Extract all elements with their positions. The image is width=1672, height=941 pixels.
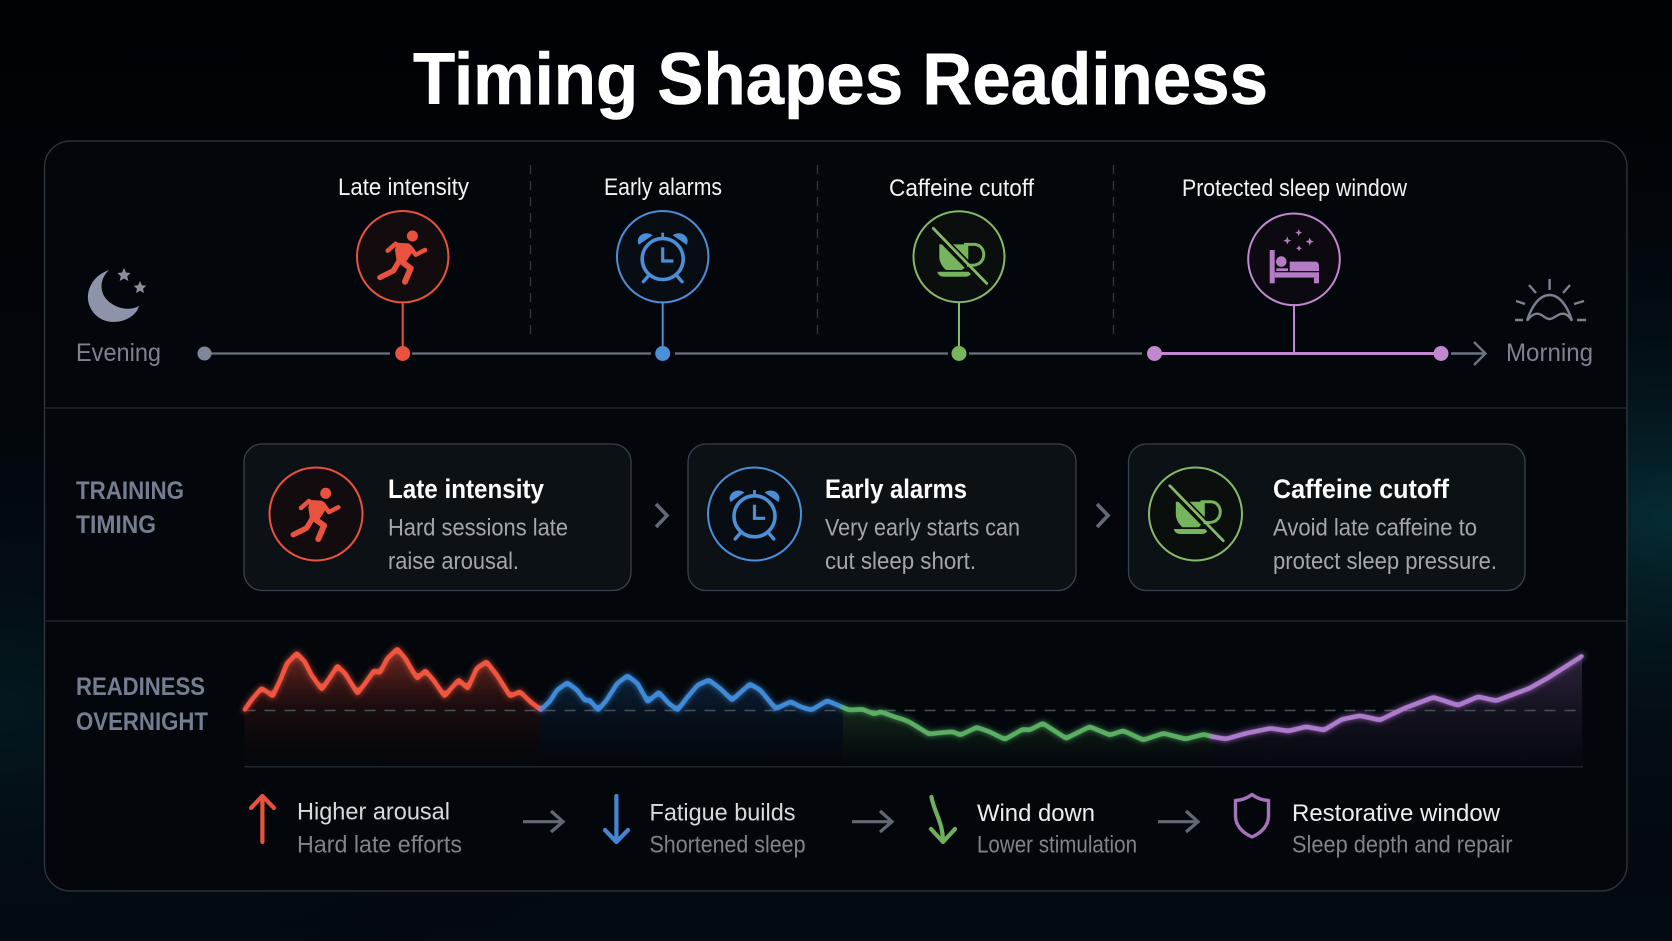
marker: Protected sleep window: Protected sleep window	[1182, 175, 1408, 202]
card: early alarms: Early alarms	[825, 474, 967, 504]
legend: fatigue builds	[605, 796, 806, 859]
arrow: to morning	[1451, 342, 1486, 365]
marker: Protected sleep window	[1147, 175, 1448, 361]
marker: Caffeine cutoff	[889, 175, 1034, 361]
legend: higher arousal: Hard late efforts	[297, 832, 462, 859]
legend: wind down: Lower stimulation	[977, 832, 1137, 859]
icon: moon and stars	[88, 268, 146, 322]
marker: Early alarms: Early alarms	[604, 174, 722, 201]
section label: training timing: TRAINING	[76, 477, 184, 505]
label: Evening: Evening	[76, 339, 161, 367]
legend: restorative window: Sleep depth and repair	[1292, 832, 1512, 859]
label: Morning: Morning	[1506, 339, 1593, 367]
legend: wind down: Wind down	[977, 800, 1095, 827]
legend: restorative window: Restorative window	[1292, 800, 1501, 827]
marker: Late intensity: Late intensity	[338, 174, 469, 201]
card: caffeine cutoff: Avoid late caffeine to	[1273, 514, 1477, 542]
arrow: legend 2	[852, 811, 892, 832]
card: early alarms: Very early starts can	[825, 514, 1020, 542]
marker: Early alarms	[604, 174, 722, 361]
legend: higher arousal: Higher arousal	[297, 798, 450, 825]
timeline axis	[204, 352, 1142, 355]
section label: readiness overnight: READINESS	[76, 673, 205, 701]
legend: higher arousal	[251, 796, 462, 859]
card: caffeine cutoff: Caffeine cutoff	[1273, 474, 1450, 504]
card: early alarms	[688, 444, 1076, 590]
legend: restorative window	[1236, 794, 1512, 859]
arrow: chevron 2	[1097, 504, 1108, 527]
card: late intensity: Late intensity	[388, 474, 544, 504]
marker: Caffeine cutoff: Caffeine cutoff	[889, 175, 1034, 202]
card: late intensity: raise arousal.	[388, 548, 519, 575]
marker: Late intensity	[338, 174, 469, 361]
timeline start dot	[198, 346, 212, 360]
card: late intensity	[244, 444, 631, 590]
title: Timing Shapes Readiness	[413, 39, 1268, 120]
legend: fatigue builds: Fatigue builds	[650, 800, 796, 827]
arrow: chevron 1	[656, 504, 667, 527]
icon: bed with sparkles	[1270, 229, 1319, 283]
card: late intensity: Hard sessions late	[388, 514, 568, 542]
arrow: legend 1	[523, 811, 563, 832]
arrow: legend 3	[1158, 811, 1198, 832]
section label: training timing: TIMING	[76, 511, 156, 539]
card: caffeine cutoff: protect sleep pressure.	[1273, 548, 1497, 575]
icon: sunrise	[1515, 279, 1586, 321]
chart: readiness curve	[244, 649, 1583, 767]
panel: timeline	[76, 174, 1593, 367]
legend: wind down	[931, 797, 1137, 859]
card: caffeine cutoff	[1128, 444, 1525, 590]
legend: fatigue builds: Shortened sleep	[650, 832, 806, 859]
panel: main container	[44, 141, 1627, 891]
section label: training timing	[76, 477, 184, 539]
section label: readiness overnight: OVERNIGHT	[76, 708, 208, 736]
section label: readiness overnight	[76, 673, 208, 736]
card: early alarms: cut sleep short.	[825, 548, 976, 575]
